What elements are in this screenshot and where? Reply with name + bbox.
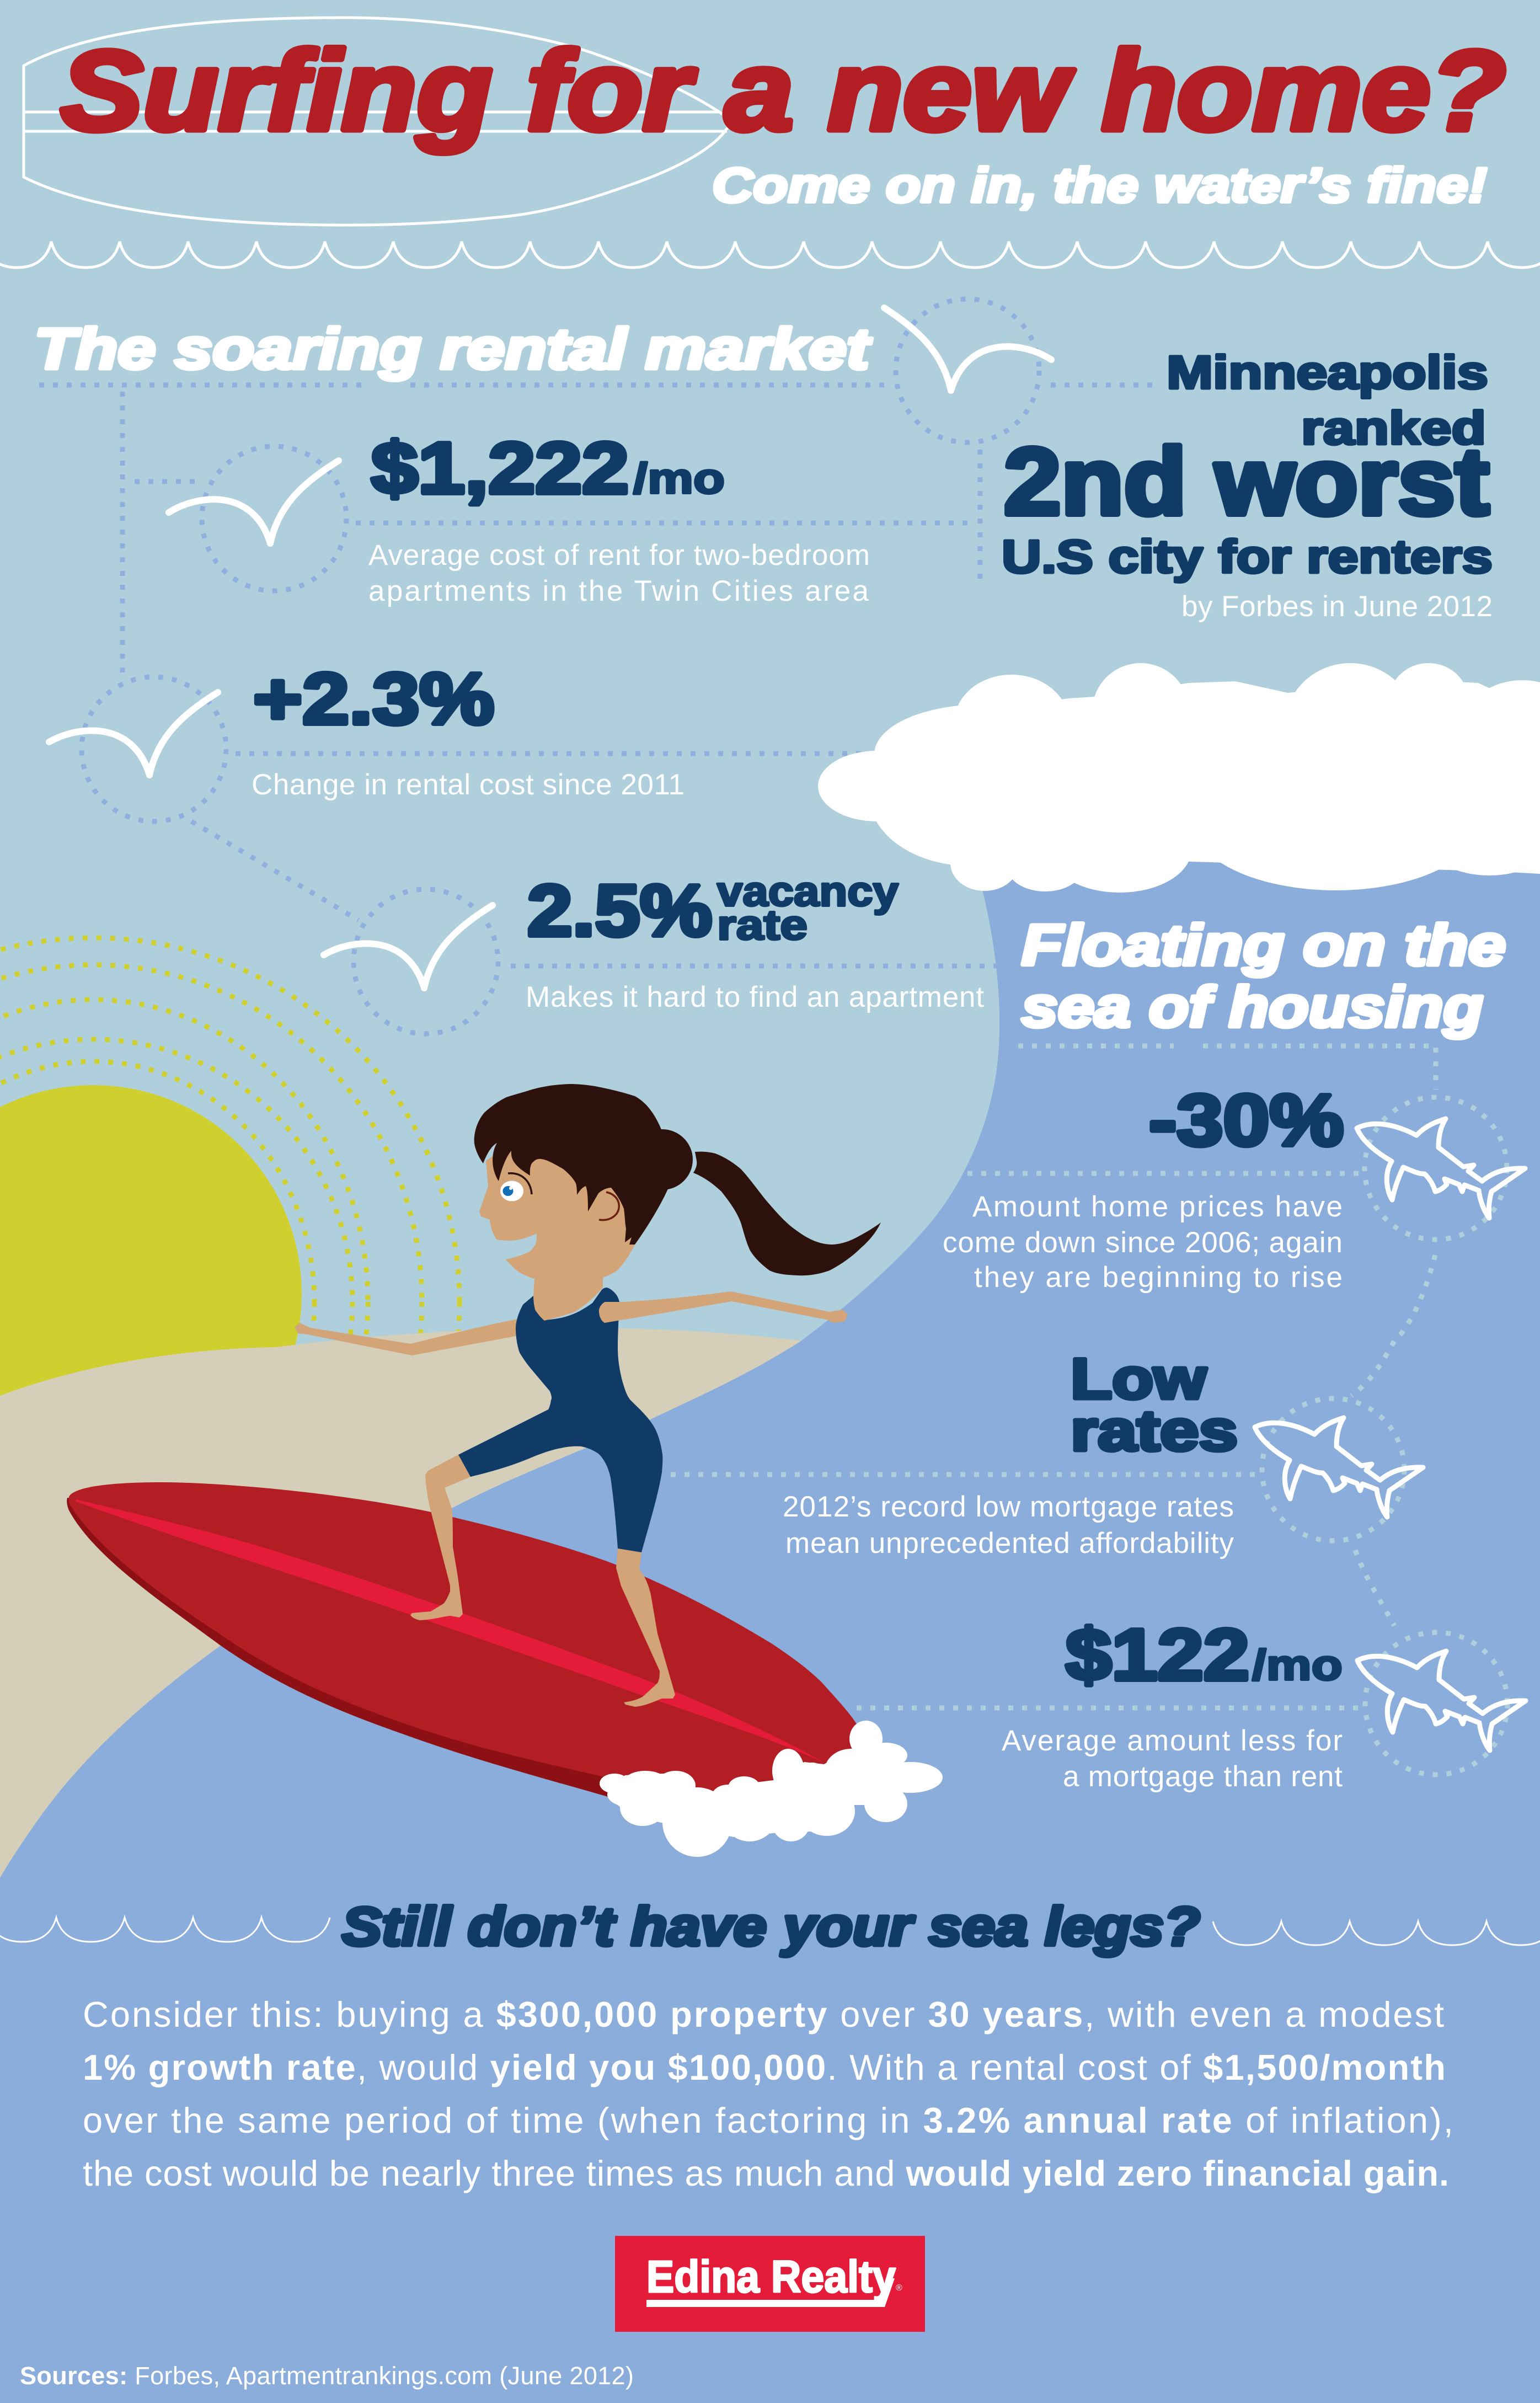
swimsuit [458, 1288, 662, 1552]
stat: Minneapolis ranking: ranked [1301, 402, 1486, 454]
body paragraph: the cost would be nearly three times as much and would yield zero financial gain. [83, 2153, 1449, 2193]
face and neck [479, 1136, 635, 1321]
stat: home prices: they are beginning to rise [974, 1261, 1343, 1294]
title: Surfing for a new home? [61, 28, 1506, 154]
housing dotted connectors [671, 1046, 1436, 1708]
body paragraph: over the same period of time (when factoring in 3.2% annual rate of inflation), [83, 2100, 1453, 2140]
stat: Minneapolis ranking [1002, 346, 1493, 623]
eye [500, 1181, 523, 1202]
left arm [295, 1319, 518, 1355]
stat: home prices: come down since 2006; again [943, 1226, 1343, 1259]
wave line: left of sea legs heading [0, 1918, 330, 1942]
hair [474, 1084, 668, 1245]
wave line: right of sea legs heading [1213, 1921, 1540, 1945]
stat: low rates: Low [1071, 1347, 1207, 1411]
hair bun [631, 1129, 693, 1190]
stat: low rates: 2012’s record low mortgage rates [783, 1491, 1234, 1523]
sun rays [0, 938, 459, 1666]
body paragraph: 1% growth rate, would yield you $100,000. With a rental cost of $1,500/month [83, 2047, 1446, 2087]
surfboard [67, 1482, 874, 1815]
stat: mortgage savings: $122 [1066, 1614, 1249, 1695]
beach sand [0, 1328, 827, 1887]
left leg [410, 1455, 470, 1620]
stat: Minneapolis ranking: 2nd worst [1004, 429, 1489, 535]
rental market dotted connectors [39, 385, 1158, 966]
sun [0, 1085, 302, 1502]
logo: Edina Realty: ® [896, 2283, 902, 2293]
subtitle: Come on in, the water’s fine! [712, 158, 1487, 212]
stat: vacancy rate [526, 868, 984, 1013]
foam splash [600, 1721, 943, 1857]
right arm [599, 1291, 848, 1323]
stat: mortgage savings: a mortgage than rent [1063, 1760, 1343, 1793]
stat: rent cost: apartments in the Twin Cities area [368, 575, 869, 607]
stat: mortgage savings [1002, 1614, 1343, 1793]
stat: low rates: rates [1071, 1399, 1238, 1463]
stat: change in rental cost [252, 658, 685, 801]
stat: change in rental cost: +2.3% [253, 658, 494, 739]
stat: Minneapolis ranking: by Forbes in June 2012 [1181, 590, 1493, 623]
shark icon: low rates [1255, 1398, 1423, 1541]
bird icon: vacancy [324, 889, 498, 1034]
right leg [616, 1548, 675, 1707]
heading: still don't have your sea legs: Still don’t have your sea legs? [342, 1896, 1200, 1957]
stat: rent cost [368, 428, 870, 607]
stat: Minneapolis ranking: U.S city for renters [1002, 531, 1493, 583]
stat: mortgage savings: /mo [1252, 1641, 1343, 1689]
surfboard outline behind title [24, 18, 731, 225]
ear [599, 1192, 619, 1220]
stat: low rates: mean unprecedented affordability [785, 1527, 1234, 1560]
stat: home prices: -30% [1149, 1080, 1344, 1161]
heading: floating on the sea of housing [1022, 914, 1506, 1039]
logo: Edina Realty [615, 2236, 925, 2332]
heading: floating on the sea of housing: Floating on the [1022, 914, 1506, 978]
stat: Minneapolis ranking: Minneapolis [1167, 346, 1488, 398]
ocean wave [0, 827, 1540, 2403]
cloud [818, 663, 1540, 893]
logo: Edina Realty: Edina Realty [646, 2252, 896, 2302]
eyebrow [508, 1173, 532, 1194]
surfer figure [295, 1084, 881, 1707]
stat: change in rental cost: Change in rental cost since 2011 [252, 768, 685, 801]
stat: rent cost: Average cost of rent for two-bedroom [368, 539, 870, 572]
sources: Sources: Forbes, Apartmentrankings.com (June 2012) [20, 2362, 634, 2390]
shark icon: home prices [1357, 1097, 1525, 1240]
stat: vacancy rate: rate [717, 902, 808, 949]
stat: rent cost: $1,222 [371, 428, 629, 509]
stat: low rates [783, 1347, 1238, 1560]
body paragraph: Consider this: buying a $300,000 property over 30 years, with even a modest [83, 1994, 1444, 2034]
bird icon: change in cost [49, 677, 226, 821]
stat: vacancy rate: vacancy [717, 868, 899, 915]
stat: vacancy rate: Makes it hard to find an apartment [526, 981, 984, 1013]
body paragraph [83, 1994, 1453, 2193]
top wave line [0, 242, 1540, 268]
stat: vacancy rate: 2.5% [527, 870, 712, 951]
bird icon: rent cost [169, 446, 346, 591]
heading: the soaring rental market: The soaring rental market [34, 317, 872, 381]
ponytail [693, 1152, 881, 1275]
stat: home prices [943, 1080, 1344, 1294]
stat: mortgage savings: Average amount less for [1002, 1724, 1343, 1757]
stat: rent cost: /mo [633, 454, 725, 503]
shark icon: mortgage savings [1357, 1632, 1526, 1775]
heading: floating on the sea of housing: sea of housing [1022, 975, 1483, 1039]
bird icon: Minneapolis [884, 299, 1051, 442]
stat: home prices: Amount home prices have [972, 1190, 1343, 1223]
